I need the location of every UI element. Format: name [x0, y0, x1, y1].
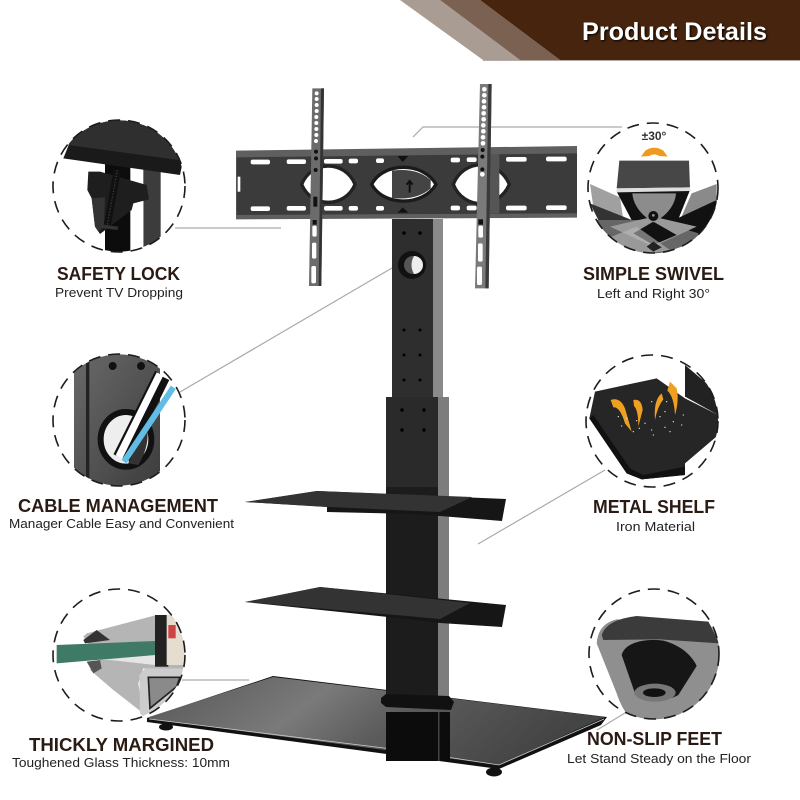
- callout line: safety lock: [175, 227, 281, 229]
- panel: non-slip feet: [567, 589, 752, 766]
- dashed ring: [588, 123, 718, 253]
- dashed ring: [586, 355, 718, 487]
- icon: shelf close-up: [589, 365, 718, 479]
- callout line: non-slip feet: [597, 713, 625, 730]
- panel: cable management: [9, 350, 234, 531]
- lower shelf: [245, 587, 506, 627]
- dashed ring: [53, 354, 185, 486]
- callout line: cable management: [180, 268, 392, 392]
- column: [381, 219, 454, 761]
- upper shelf: [245, 491, 506, 521]
- title: Product Details: [582, 18, 767, 46]
- description: Iron Material: [616, 519, 695, 534]
- heading: CABLE MANAGEMENT: [18, 496, 218, 516]
- icon: rotation arrow: [641, 148, 668, 157]
- panel: thickly margined: [12, 589, 230, 770]
- icon: rubber foot close-up: [597, 616, 723, 723]
- heading: SIMPLE SWIVEL: [583, 264, 724, 284]
- icon: cable hole close-up: [74, 350, 173, 490]
- icon: glass thickness close-up: [57, 615, 187, 720]
- panel: metal shelf: [586, 355, 718, 534]
- heading: SAFETY LOCK: [57, 264, 180, 284]
- right mount bracket: [475, 84, 492, 288]
- description: Let Stand Steady on the Floor: [567, 751, 752, 766]
- description: Prevent TV Dropping: [55, 285, 183, 300]
- callout line: simple swivel: [413, 127, 622, 137]
- icon: swivel close-up: [590, 129, 717, 257]
- description: Manager Cable Easy and Convenient: [9, 516, 234, 531]
- dashed ring: [53, 589, 185, 721]
- callout line: thickly margined: [182, 679, 249, 681]
- panel: safety lock: [53, 117, 187, 300]
- glass base: [147, 676, 607, 776]
- heading: NON-SLIP FEET: [587, 729, 722, 749]
- panel: simple swivel: [583, 123, 724, 301]
- header banner: [400, 0, 800, 61]
- heading: THICKLY MARGINED: [29, 735, 214, 755]
- callout line: metal shelf: [478, 470, 605, 544]
- icon: safety lock close-up: [63, 117, 187, 253]
- left mount bracket: [309, 88, 324, 286]
- product: TV stand: [147, 84, 607, 777]
- wall mount plate: [236, 146, 577, 219]
- description: Toughened Glass Thickness: 10mm: [12, 755, 230, 770]
- dashed ring: [53, 120, 185, 252]
- heading: METAL SHELF: [593, 497, 715, 517]
- description: Left and Right 30°: [597, 286, 710, 301]
- rotation label: ±30°: [642, 129, 667, 143]
- dashed ring: [589, 589, 719, 719]
